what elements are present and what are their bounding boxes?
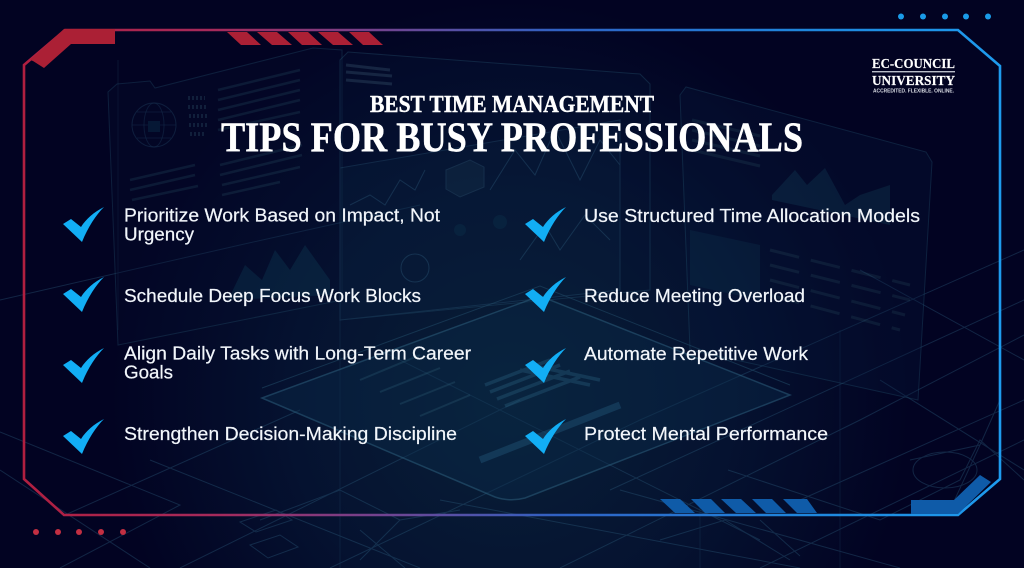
tip: align daily tasks: Align Daily Tasks with Long-Term Career: [124, 344, 471, 364]
tip: structured time allocation: [525, 206, 920, 242]
tip: decision-making discipline: [63, 419, 457, 454]
title: BEST TIME MANAGEMENT: [370, 92, 654, 118]
panel: left dashboard: [108, 48, 342, 345]
logo: EC-Council University: ACCREDITED. FLEXIBLE. ONLINE.: [873, 88, 955, 94]
tip: prioritize work: [63, 206, 440, 244]
dots: bottom left red: [33, 529, 126, 535]
panel: centre tablet: [262, 286, 790, 500]
tip: automate repetitive work: Automate Repetitive Work: [584, 344, 809, 364]
tip: deep focus blocks: Schedule Deep Focus Work Blocks: [124, 286, 421, 306]
logo: EC-Council University: EC-COUNCIL: [872, 56, 955, 71]
tip: protect mental performance: Protect Mental Performance: [584, 424, 828, 444]
title: [221, 92, 803, 162]
tip: align daily tasks: [63, 344, 471, 383]
logo: EC-Council University: UNIVERSITY: [872, 73, 955, 88]
tip: reduce meetings: [525, 277, 805, 312]
tip: deep focus blocks: [63, 277, 421, 312]
dots: top right blue: [898, 14, 991, 20]
tip: prioritize work: Prioritize Work Based on Impact, Not: [124, 206, 440, 226]
corner accent: bottom right blue: [911, 475, 991, 514]
tip: automate repetitive work: [525, 344, 809, 383]
title: TIPS FOR BUSY PROFESSIONALS: [221, 116, 803, 162]
tip: prioritize work: Urgency: [124, 224, 194, 244]
stripes: bottom blue: [660, 499, 817, 513]
tip: reduce meetings: Reduce Meeting Overload: [584, 286, 805, 306]
panel: right dashboard: [680, 87, 932, 400]
tip: decision-making discipline: Strengthen Decision-Making Discipline: [124, 424, 457, 444]
tip: structured time allocation: Use Structured Time Allocation Models: [584, 206, 920, 226]
panel: centre back dashboard: [340, 52, 650, 320]
tip: protect mental performance: [525, 419, 828, 454]
logo: EC-Council University: [872, 56, 955, 94]
stripes: top red: [227, 32, 383, 45]
tip: align daily tasks: Goals: [124, 362, 173, 382]
corner accent: top left red: [30, 29, 115, 68]
